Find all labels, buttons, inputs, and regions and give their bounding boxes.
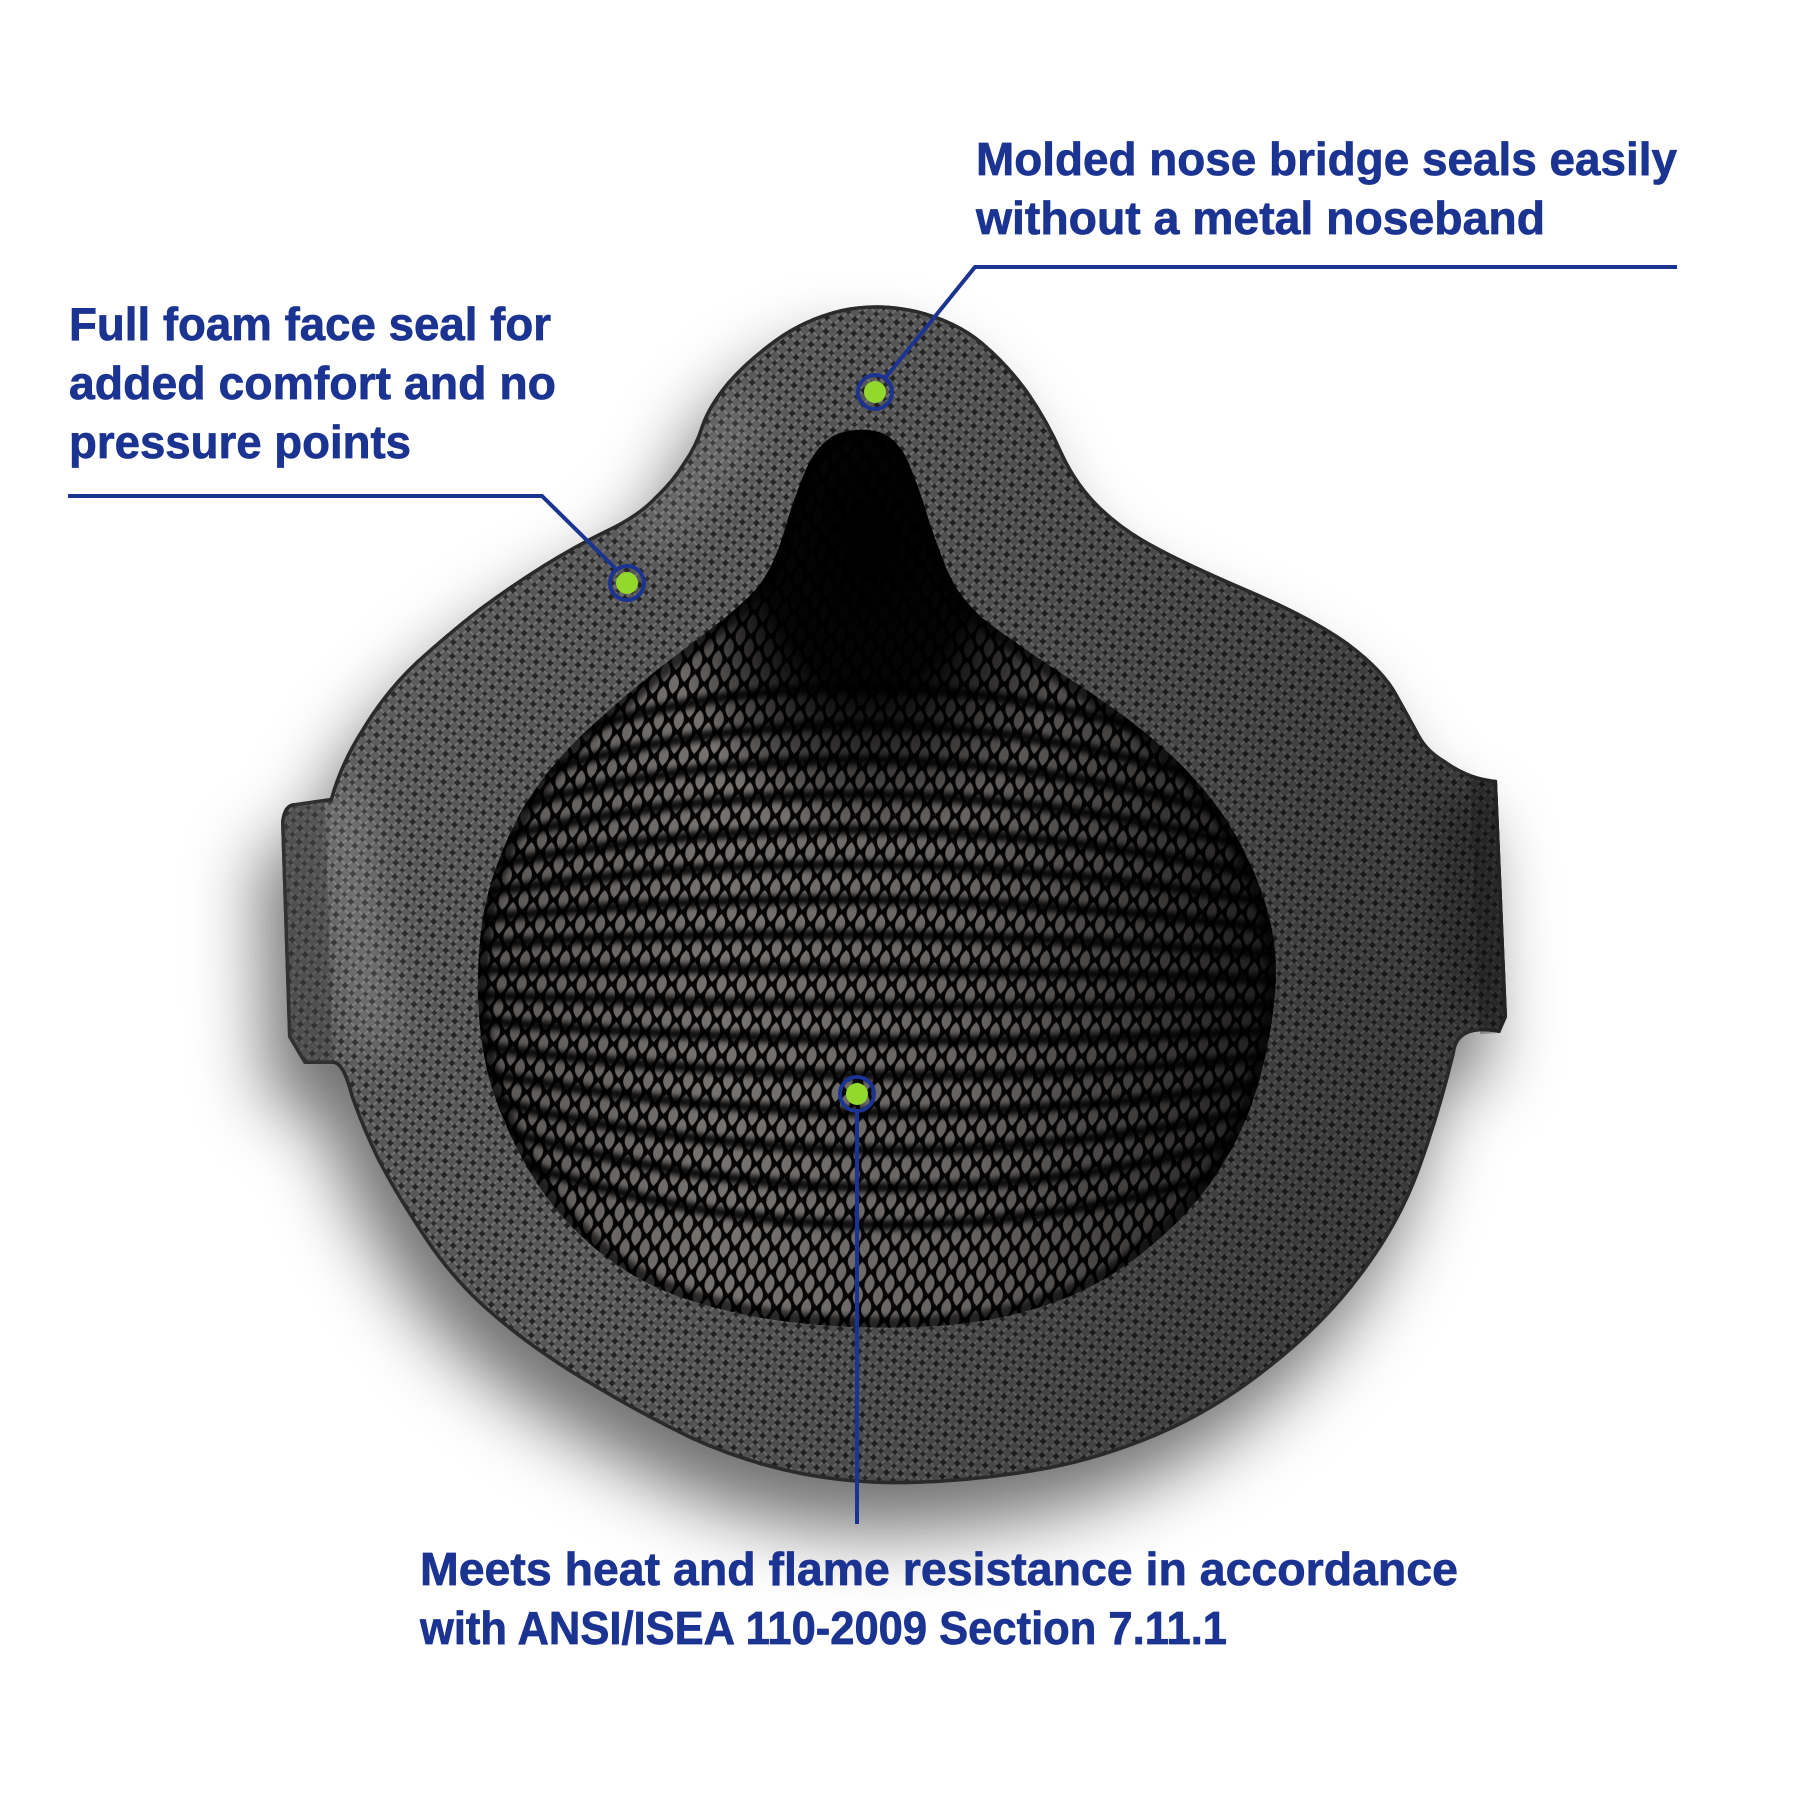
callout: molded nose bridge: without a metal noseband: [975, 192, 1545, 244]
callout: full foam face seal: added comfort and no: [69, 357, 556, 409]
callout text: heat and flame: Meets heat and flame resistance in accordance: [420, 1543, 1458, 1595]
left ear tab: [281, 800, 333, 1064]
leader line: heat and flame: [855, 1112, 859, 1524]
inner filter mesh: [478, 430, 1276, 1328]
leader line: foam seal: [68, 496, 616, 569]
mesh ribs: [470, 687, 1280, 1225]
callout: heat and flame resistance: with ANSI/ISEA 110-2009 Section 7.11.1: [419, 1602, 1227, 1654]
drop shadow under mask: [261, 351, 1487, 1530]
callout: heat and flame resistance: [419, 1077, 1458, 1654]
callout: molded nose bridge: [858, 133, 1677, 409]
callout: full foam face seal: [68, 298, 644, 600]
callout text: foam seal: Full foam face seal for: [69, 298, 551, 350]
callout: full foam face seal: pressure points: [69, 416, 411, 468]
marker: nose bridge: [858, 375, 892, 409]
callout text: nose bridge: Molded nose bridge seals easily: [976, 133, 1677, 185]
marker: heat and flame: [840, 1077, 874, 1111]
foam face seal: [270, 295, 1520, 1495]
mask photo: [270, 290, 1520, 1495]
leader line: nose bridge: [886, 267, 1677, 377]
marker: foam seal: [610, 566, 644, 600]
right ear tab: [1470, 775, 1507, 1034]
